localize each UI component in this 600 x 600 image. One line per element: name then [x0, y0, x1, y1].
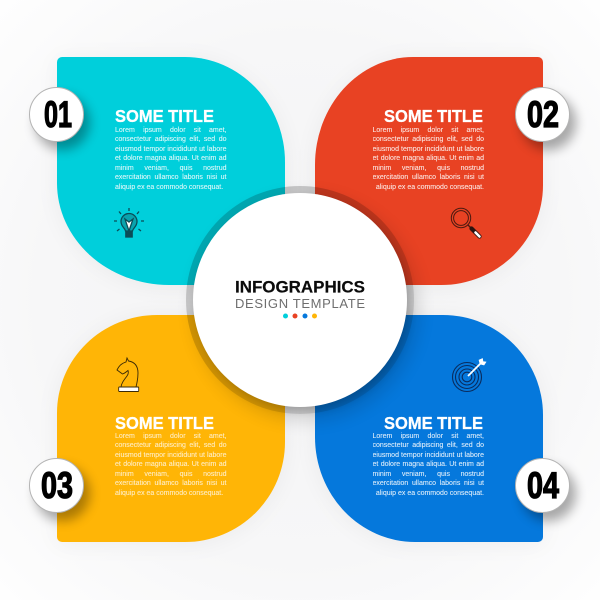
color dots: [283, 314, 317, 318]
title 1: SOME TITLE: [115, 106, 214, 126]
icon: magnifying glass: [450, 208, 482, 239]
title 4: SOME TITLE: [384, 412, 483, 432]
body text 3: Lorem ipsum dolor sit amet,: [115, 433, 226, 440]
number badge 03: 03: [41, 465, 73, 506]
body text 3: aliquip ex ea commodo consequat.: [115, 490, 223, 497]
center circle ring: [186, 186, 414, 414]
number badge 04: 04: [527, 465, 559, 506]
body text 4: Lorem ipsum dolor sit amet,: [372, 433, 484, 440]
body text 3: exercitation ullamco laboris nisi ut: [115, 480, 226, 487]
body text 2: minim veniam, quis nostrud: [372, 165, 484, 172]
body text 4: exercitation ullamco laboris nisi ut: [372, 480, 484, 487]
title 2: SOME TITLE: [384, 106, 483, 126]
body text 4: [372, 432, 484, 497]
number badge 04: [515, 458, 570, 513]
panel 4: blue: [315, 315, 543, 542]
number badge 03: [29, 458, 84, 513]
body text 1: et dolore magna aliqua. Ut enim ad: [115, 155, 226, 162]
body text 4: et dolore magna aliqua. Ut enim ad: [372, 461, 484, 468]
center heading: DESIGN TEMPLATE: [235, 296, 365, 311]
number badge 01: 01: [44, 94, 72, 135]
body text 2: [372, 126, 484, 191]
body text 4: consectetur adipiscing elit, sed do: [372, 442, 484, 449]
body text 2: et dolore magna aliqua. Ut enim ad: [372, 155, 484, 162]
body text 3: [115, 432, 226, 497]
center heading: [235, 278, 365, 311]
body text 3: consectetur adipiscing elit, sed do: [115, 442, 226, 449]
panel 1: cyan: [57, 57, 285, 285]
body text 1: minim veniam, quis nostrud: [115, 165, 226, 172]
icon: chess knight: [116, 356, 140, 392]
number badge 02: 02: [527, 94, 559, 135]
body text 2: Lorem ipsum dolor sit amet,: [372, 127, 484, 134]
body text 1: Lorem ipsum dolor sit amet,: [115, 127, 226, 134]
icon: light bulb: [114, 208, 144, 238]
body text 3: minim veniam, quis nostrud: [115, 471, 226, 478]
body text 1: eiusmod tempor incididunt ut labore: [115, 146, 226, 153]
body text 1: exercitation ullamco laboris nisi ut: [115, 174, 226, 181]
number badge 01: [29, 87, 84, 142]
panel 3: yellow: [57, 315, 285, 542]
body text 1: [115, 126, 226, 191]
body text 4: minim veniam, quis nostrud: [372, 471, 484, 478]
body text 2: aliquip ex ea commodo consequat.: [376, 184, 484, 191]
body text 3: eiusmod tempor incididunt ut labore: [115, 452, 226, 459]
body text 3: et dolore magna aliqua. Ut enim ad: [115, 461, 226, 468]
body text 4: aliquip ex ea commodo consequat.: [376, 490, 484, 497]
body text 1: consectetur adipiscing elit, sed do: [115, 136, 226, 143]
title 3: SOME TITLE: [115, 412, 214, 432]
body text 2: exercitation ullamco laboris nisi ut: [372, 174, 484, 181]
number badge 02: [515, 87, 570, 142]
body text 2: consectetur adipiscing elit, sed do: [372, 136, 484, 143]
body text 4: eiusmod tempor incididunt ut labore: [372, 452, 484, 459]
body text 2: eiusmod tempor incididunt ut labore: [372, 146, 484, 153]
panel 2: red: [315, 57, 543, 285]
icon: target with dart: [452, 358, 486, 392]
center heading: INFOGRAPHICS: [235, 278, 365, 296]
center circle: [193, 193, 407, 407]
body text 1: aliquip ex ea commodo consequat.: [115, 184, 223, 191]
